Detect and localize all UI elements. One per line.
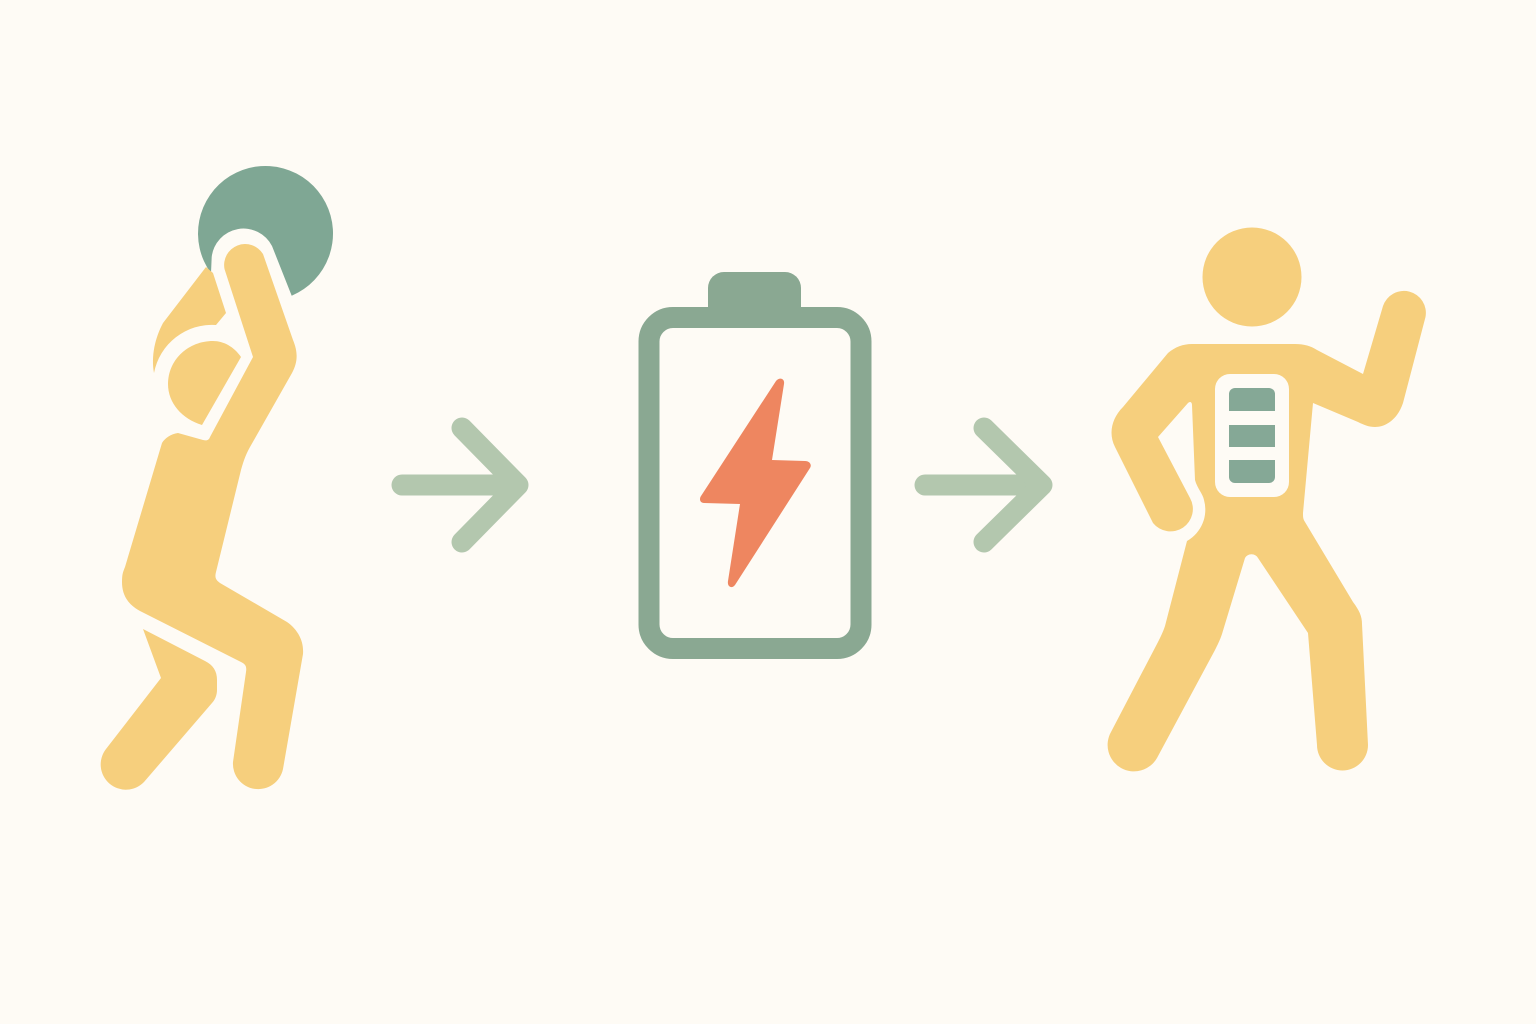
charge bar: bottom — [1229, 460, 1275, 483]
battery slot — [1215, 374, 1289, 497]
icon: head — [1202, 228, 1302, 326]
icon: chest battery — [1215, 374, 1289, 497]
battery body — [649, 318, 861, 648]
icon: ball — [198, 166, 333, 296]
icon: front leg — [101, 629, 217, 790]
figure: energised person with charged battery — [1108, 228, 1426, 771]
charge bar: top — [1229, 388, 1275, 411]
charge bar: middle — [1229, 425, 1275, 447]
icon: battery with lightning bolt — [649, 272, 861, 648]
icon: body and raised arm with back leg — [122, 244, 303, 789]
battery cap — [708, 272, 801, 312]
figure: person throwing a ball — [101, 166, 333, 790]
arrow: from battery to energised person — [925, 428, 1042, 542]
icon: head — [168, 341, 241, 425]
arrow: from person to battery — [402, 428, 518, 542]
lightning bolt — [700, 379, 811, 587]
icon: hair — [153, 267, 226, 373]
icon: body, arms and legs — [1108, 291, 1426, 771]
